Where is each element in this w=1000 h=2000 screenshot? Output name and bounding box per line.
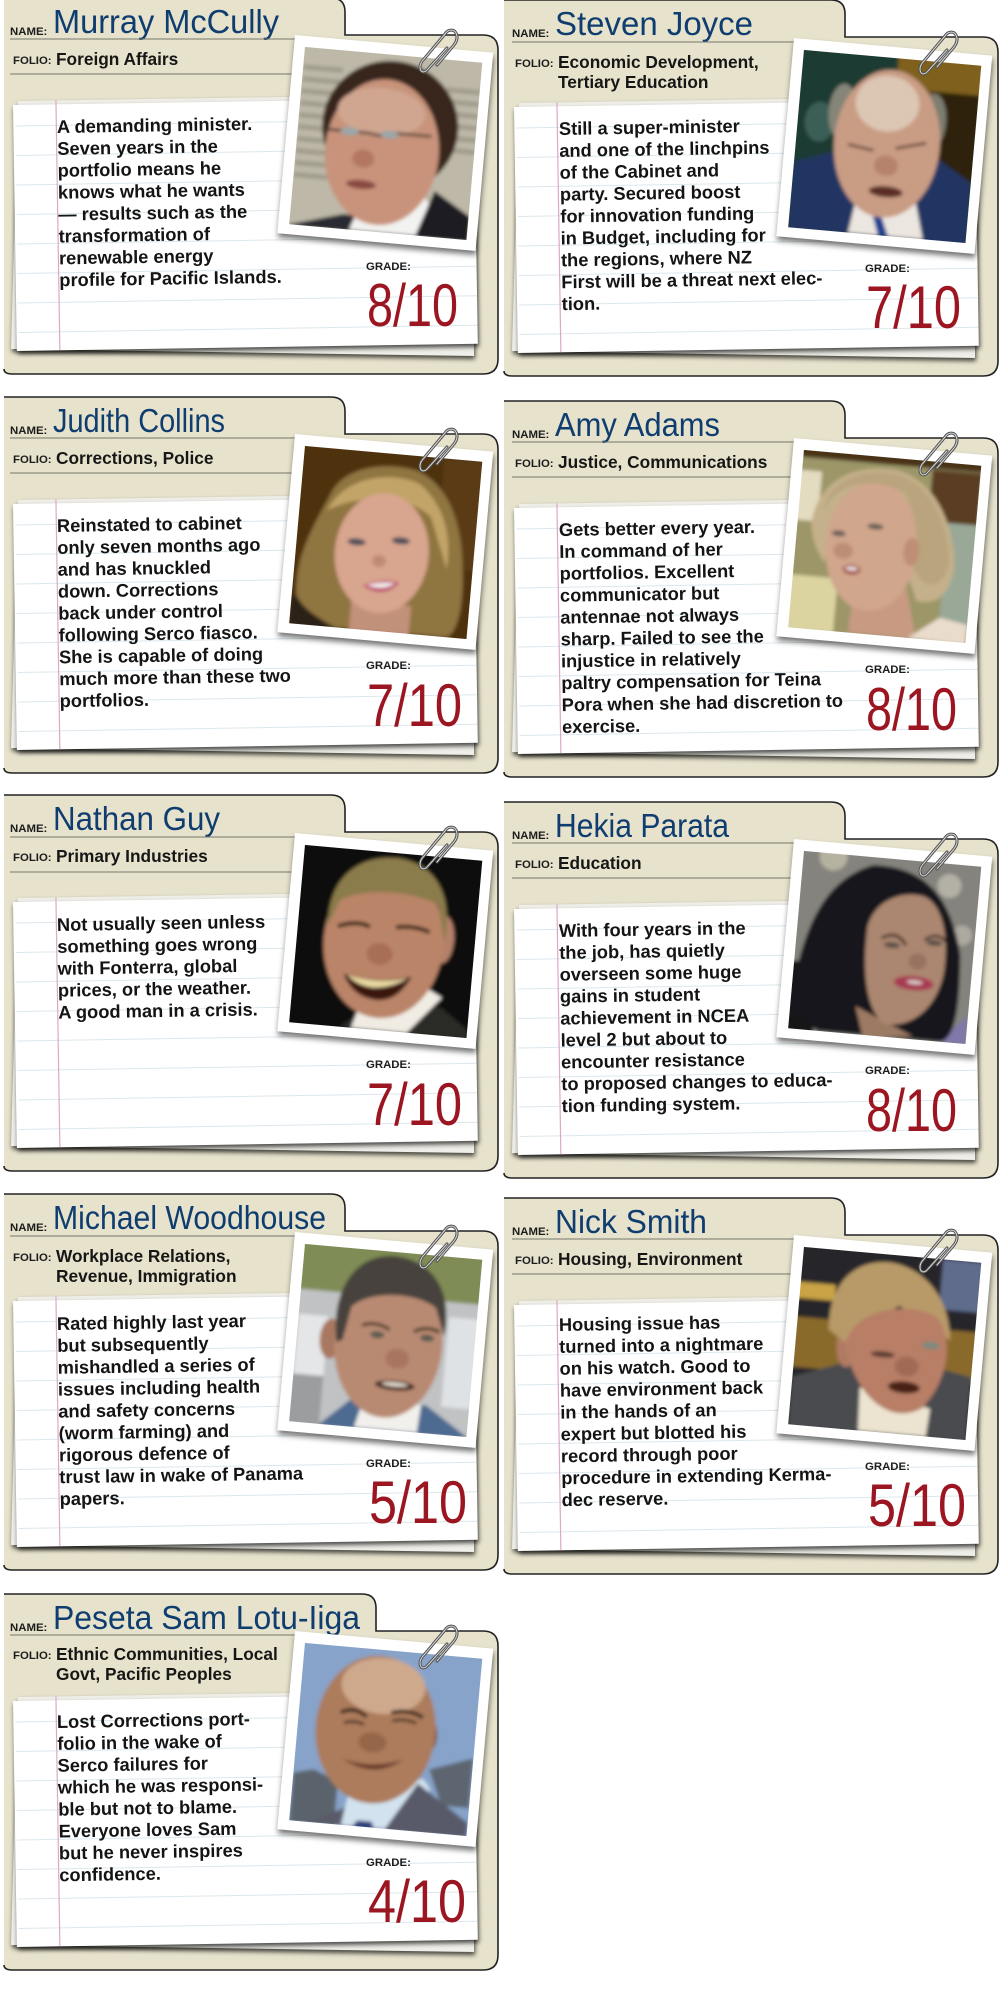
folio: Education (558, 853, 642, 873)
comment text: Still a super-minister (559, 115, 740, 139)
comment text: Lost Corrections port- (57, 1708, 250, 1732)
comment text: achievement in NCEA (560, 1005, 749, 1029)
icon: paperclip (920, 834, 957, 876)
name row (10, 402, 300, 439)
folio (10, 846, 295, 872)
comment text: renewable energy (59, 245, 214, 268)
folder (4, 795, 498, 1171)
comment text: portfolios. (59, 689, 149, 711)
folio (512, 452, 795, 477)
name row: NAME: (10, 26, 47, 38)
folio: FOLIO: (515, 58, 554, 70)
grade: GRADE: (366, 660, 411, 672)
name row: Nick Smith (555, 1203, 707, 1240)
comment text: exercise. (562, 715, 640, 737)
comment text (57, 113, 282, 290)
comment text: sharp. Failed to see the (560, 625, 764, 649)
folder (504, 802, 998, 1178)
comment text: procedure in extending Kerma- (561, 1463, 832, 1488)
name row: Murray McCully (53, 3, 279, 40)
grade: 8/10 (866, 676, 957, 743)
folio: FOLIO: (13, 1252, 52, 1264)
comment text: rigorous defence of (59, 1442, 231, 1465)
folio: Govt, Pacific Peoples (56, 1664, 232, 1684)
notepaper (11, 94, 478, 356)
comment text: only seven months ago (57, 534, 261, 558)
notepaper (11, 891, 478, 1153)
comment text: First will be a threat next elec- (561, 267, 823, 292)
comment text: Seven years in the (57, 135, 218, 159)
comment text: party. Secured boost (560, 181, 741, 205)
name row (10, 800, 300, 837)
folder (4, 397, 498, 773)
comment text: Serco failures for (57, 1752, 208, 1776)
name row: Nathan Guy (53, 800, 220, 837)
comment text: papers. (60, 1487, 125, 1509)
comment text: something goes wrong (57, 933, 257, 957)
name row: NAME: (10, 823, 47, 835)
comment text: on his watch. Good to (559, 1355, 751, 1379)
grade (865, 664, 957, 743)
name row (512, 406, 800, 443)
comment text: transformation of (58, 223, 211, 246)
name row: NAME: (512, 429, 549, 441)
comment text: of the Cabinet and (559, 159, 719, 183)
grade: GRADE: (865, 664, 910, 676)
name row: NAME: (10, 1622, 47, 1634)
panel: Hekia Parata card (504, 802, 998, 1178)
panel: Steven Joyce card (504, 0, 998, 376)
folio: FOLIO: (13, 852, 52, 864)
panel: Peseta Sam Lotu-Iiga card (4, 1594, 498, 1970)
grade: GRADE: (366, 261, 411, 273)
grade (366, 261, 458, 339)
comment text (559, 114, 823, 314)
photo: Nathan Guy (277, 833, 493, 1049)
comment text: — results such as the (58, 201, 247, 225)
icon: paperclip (420, 30, 457, 72)
comment text (57, 511, 291, 711)
folio: FOLIO: (13, 55, 52, 67)
folio: Economic Development, (558, 52, 759, 72)
comment text (57, 1309, 304, 1509)
folio: Corrections, Police (56, 448, 214, 468)
grade: GRADE: (366, 1059, 411, 1071)
comment text: and has knuckled (57, 556, 211, 580)
comment text: encounter resistance (561, 1048, 745, 1072)
panel: Nathan Guy card (4, 795, 498, 1171)
comment text: the regions, where NZ (561, 246, 752, 270)
comment text: folio in the wake of (57, 1730, 223, 1754)
comment text: turned into a nightmare (559, 1333, 764, 1357)
comment text: Reinstated to cabinet (57, 512, 242, 536)
name row: Steven Joyce (555, 5, 753, 42)
notepaper (11, 1690, 478, 1952)
photo: Murray McCully (277, 35, 493, 251)
comment text: record through poor (561, 1443, 738, 1466)
comment text: tion. (561, 293, 600, 314)
comment text (559, 916, 833, 1116)
folio (13, 1246, 237, 1286)
comment text: for innovation funding (560, 203, 754, 227)
photo: Michael Woodhouse (277, 1232, 493, 1448)
comment text: In command of her (559, 538, 723, 562)
name row: Hekia Parata (555, 807, 730, 844)
grade: 7/10 (367, 1071, 462, 1138)
comment text (559, 1310, 832, 1510)
notepaper (11, 1290, 478, 1552)
grade: 7/10 (367, 672, 462, 739)
comment text (56, 1708, 265, 1885)
comment text: have environment back (560, 1376, 764, 1401)
name row: NAME: (10, 1222, 47, 1234)
comment text: trust law in wake of Panama (59, 1462, 304, 1487)
comment text: A demanding minister. (57, 113, 252, 137)
grade: 5/10 (369, 1469, 467, 1536)
folio (13, 1644, 278, 1684)
panel: Murray McCully card (4, 0, 498, 374)
comment text: A good man in a crisis. (58, 998, 258, 1023)
name row: NAME: (10, 425, 47, 437)
folio (512, 853, 795, 878)
comment text: Everyone loves Sam (58, 1818, 237, 1841)
name row: Judith Collins (53, 402, 225, 439)
comment text: ble but not to blame. (58, 1796, 237, 1820)
folder (504, 1198, 998, 1574)
comment text: much more than these two (59, 665, 291, 689)
comment text: back under control (58, 600, 223, 624)
name row: NAME: (512, 28, 549, 40)
comment text: dec reserve. (561, 1488, 669, 1510)
comment text: Gets better every year. (559, 516, 755, 540)
folio (10, 49, 295, 74)
notepaper (512, 898, 979, 1160)
folder (4, 1594, 498, 1970)
folio: Ethnic Communities, Local (56, 1644, 278, 1664)
name row (512, 807, 800, 844)
folio: Tertiary Education (558, 72, 708, 92)
comment text: paltry compensation for Teina (561, 668, 822, 693)
comment text: level 2 but about to (560, 1027, 727, 1050)
notepaper (512, 1294, 979, 1556)
comment text: issues including health (58, 1376, 260, 1400)
comment text: profile for Pacific Islands. (59, 266, 282, 290)
folder (504, 0, 998, 376)
name row: Michael Woodhouse (53, 1199, 326, 1236)
folio: Revenue, Immigration (56, 1266, 237, 1286)
comment text: mishandled a series of (57, 1354, 256, 1378)
name row: Peseta Sam Lotu-Iiga (53, 1599, 361, 1636)
name row (512, 5, 800, 42)
grade: GRADE: (865, 263, 910, 275)
grade: 8/10 (367, 272, 458, 339)
icon: paperclip (920, 433, 957, 475)
photo: Peseta Sam Lotu-Iiga (277, 1631, 493, 1847)
comment text: gains in student (560, 983, 700, 1007)
folio: Justice, Communications (558, 452, 767, 472)
icon: paperclip (420, 827, 457, 869)
panel: Amy Adams card (504, 401, 998, 777)
comment text: in Budget, including for (560, 224, 766, 248)
comment text: antennae not always (560, 604, 739, 628)
folio: FOLIO: (515, 458, 554, 470)
folder (4, 1194, 498, 1570)
panel: Judith Collins card (4, 397, 498, 773)
grade (865, 1065, 957, 1144)
folio: Workplace Relations, (56, 1246, 230, 1266)
name row: Amy Adams (555, 406, 720, 443)
comment text: to proposed changes to educa- (561, 1069, 833, 1094)
folio: FOLIO: (13, 454, 52, 466)
grade: GRADE: (865, 1461, 910, 1473)
comment text: the job, has quietly (559, 939, 726, 963)
comment text: following Serco fiasco. (58, 621, 258, 645)
comment text: down. Corrections (58, 578, 219, 602)
comment text (56, 911, 267, 1023)
grade: GRADE: (865, 1065, 910, 1077)
comment text: which he was responsi- (57, 1773, 263, 1798)
grade: 4/10 (368, 1868, 466, 1935)
icon: paperclip (420, 1626, 457, 1668)
comment text: communicator but (560, 582, 720, 606)
photo: Nick Smith (776, 1235, 992, 1451)
comment text (559, 515, 844, 737)
folio: FOLIO: (515, 1255, 554, 1267)
comment text: Pora when she had discretion to (561, 690, 843, 715)
notepaper (11, 493, 478, 755)
comment text: portfolio means he (57, 157, 221, 181)
comment text: She is capable of doing (59, 643, 263, 667)
photo: Amy Adams (776, 438, 992, 654)
folio: FOLIO: (13, 1650, 52, 1662)
comment text: and safety concerns (58, 1398, 235, 1422)
comment text: Rated highly last year (57, 1310, 246, 1334)
grade: GRADE: (366, 1857, 411, 1869)
folder (4, 0, 498, 374)
comment text: Housing issue has (559, 1311, 721, 1335)
photo: Hekia Parata (776, 839, 992, 1055)
comment text: but he never inspires (59, 1839, 243, 1863)
folio (10, 448, 295, 473)
comment text: Not usually seen unless (57, 911, 265, 935)
icon: paperclip (920, 1230, 957, 1272)
comment text: prices, or the weather. (58, 977, 251, 1001)
name row: NAME: (512, 830, 549, 842)
folio: Primary Industries (56, 846, 208, 866)
photo: Judith Collins (277, 434, 493, 650)
panel: Michael Woodhouse card (4, 1194, 498, 1570)
panel: Nick Smith card (504, 1198, 998, 1574)
comment text: tion funding system. (561, 1092, 741, 1116)
grade: 5/10 (868, 1472, 966, 1539)
grade: 8/10 (866, 1077, 957, 1144)
folio (515, 52, 759, 92)
comment text: (worm farming) and (58, 1420, 229, 1443)
photo: Steven Joyce (776, 38, 992, 254)
comment text: in the hands of an (560, 1399, 717, 1423)
grade: 7/10 (866, 274, 961, 341)
comment text: but subsequently (57, 1333, 210, 1356)
comment text: with Fonterra, global (56, 955, 238, 979)
comment text: and one of the linchpins (559, 137, 770, 161)
folder (504, 401, 998, 777)
comment text: confidence. (59, 1863, 161, 1885)
icon: paperclip (920, 32, 957, 74)
grade: GRADE: (366, 1458, 411, 1470)
comment text: portfolios. Excellent (559, 560, 734, 584)
comment text: knows what he wants (58, 179, 245, 203)
comment text: injustice in relatively (561, 648, 742, 671)
comment text: overseen some huge (559, 961, 742, 985)
folio: Housing, Environment (558, 1249, 743, 1269)
icon: paperclip (420, 429, 457, 471)
icon: paperclip (420, 1226, 457, 1268)
notepaper (512, 96, 979, 358)
folio: FOLIO: (515, 859, 554, 871)
name row: NAME: (512, 1226, 549, 1238)
comment text: expert but blotted his (560, 1421, 747, 1444)
name row (512, 1203, 800, 1240)
comment text: With four years in the (559, 917, 746, 941)
folio (512, 1249, 795, 1274)
notepaper (512, 497, 979, 759)
folio: Foreign Affairs (56, 49, 178, 69)
